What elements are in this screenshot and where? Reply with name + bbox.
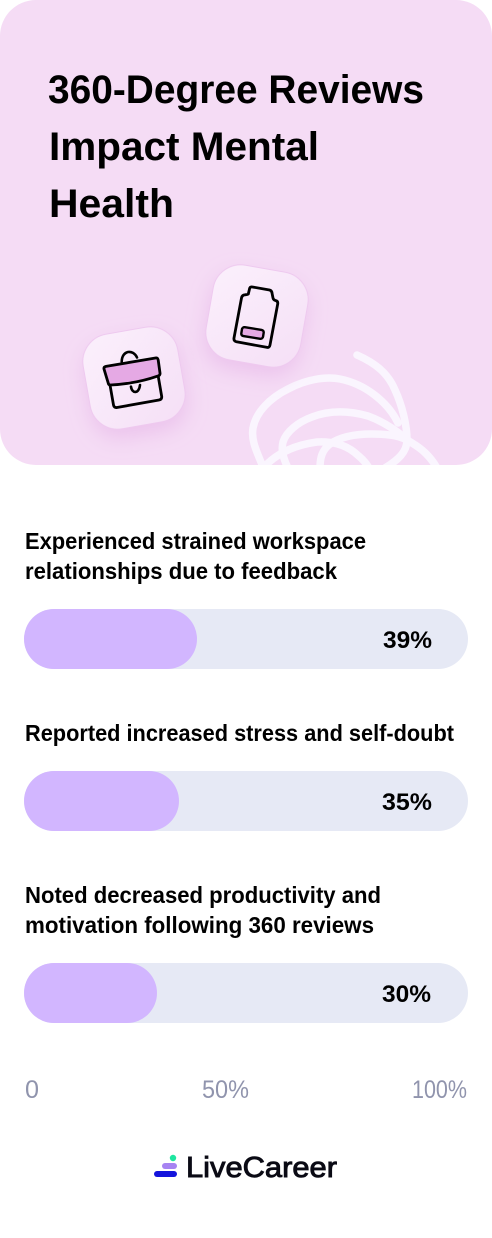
bar: 35%: 35%	[382, 789, 432, 816]
title: 360-Degree Reviews	[48, 68, 424, 112]
bar: 30%	[24, 963, 468, 1023]
text: first bar label: Experienced strained workspace	[25, 528, 366, 554]
text: third bar label: motivation following 360 reviews	[25, 912, 374, 938]
title: Impact Mental	[49, 125, 319, 169]
bar: 39%: 39%	[383, 627, 432, 654]
axis labels: 50%	[202, 1076, 249, 1104]
axis labels: 100%	[412, 1076, 467, 1104]
title	[48, 68, 424, 226]
text: second bar label: Reported increased stress and self-doubt	[25, 720, 454, 746]
bar: 30%: 30%	[382, 981, 431, 1008]
bar: 39%	[24, 609, 468, 669]
panel: hero header	[0, 0, 492, 468]
icon: briefcase card	[78, 322, 190, 434]
icon: battery card	[201, 260, 313, 372]
axis labels: 0	[25, 1076, 39, 1104]
icon: white scribble	[253, 355, 437, 468]
text: first bar label	[25, 528, 366, 584]
text: third bar label: Noted decreased productivity and	[25, 882, 381, 908]
icon: logo mark	[154, 1155, 177, 1177]
logo: LiveCareer: LiveCareer	[186, 1152, 337, 1184]
axis labels	[25, 1076, 467, 1104]
title: Health	[49, 182, 174, 226]
text: first bar label: relationships due to feedback	[25, 558, 337, 584]
text: third bar label	[25, 882, 381, 938]
bar: 35%	[24, 771, 468, 831]
